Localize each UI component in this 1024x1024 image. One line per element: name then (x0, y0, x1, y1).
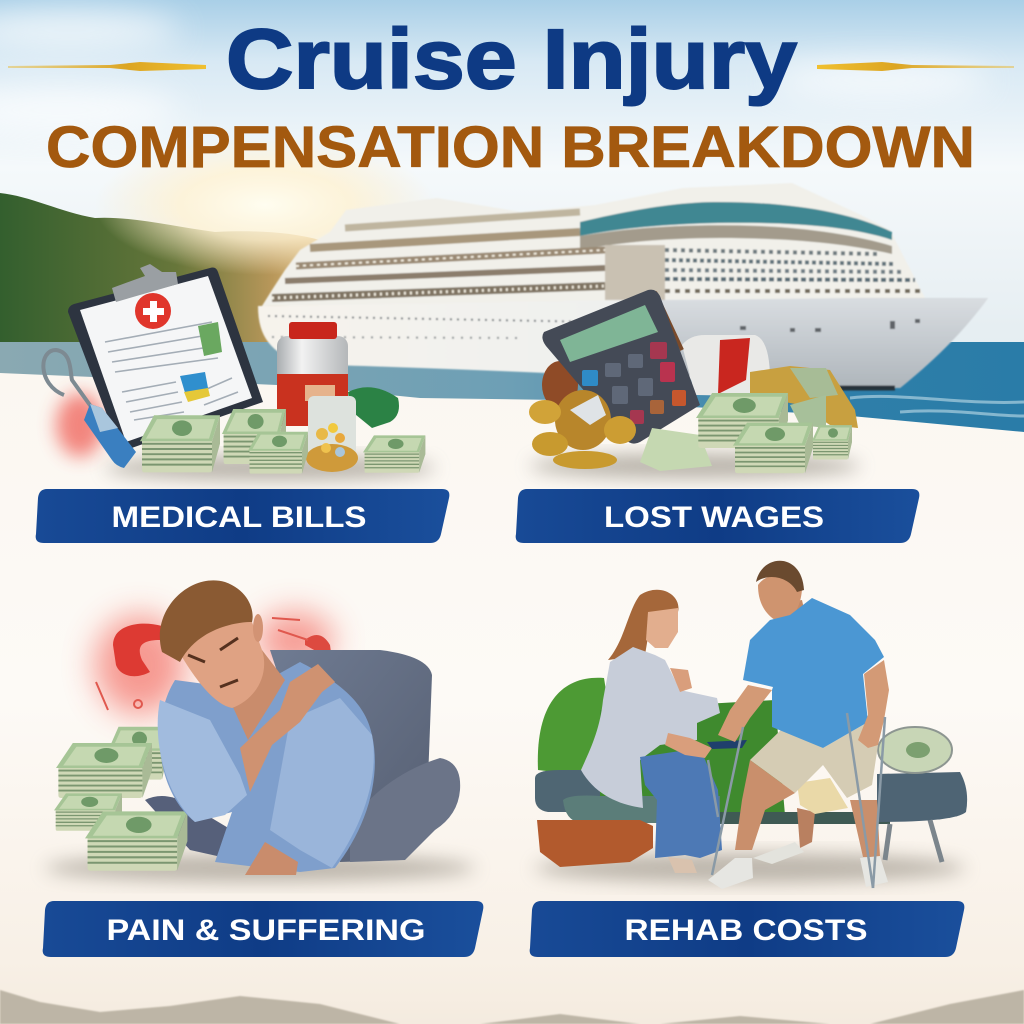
ground shadow (105, 456, 435, 480)
icon: clipboard (68, 264, 263, 450)
back leg and shoe (797, 808, 815, 848)
neck (232, 650, 285, 740)
forearm and hand (240, 664, 335, 792)
face (646, 608, 678, 648)
icon: cash stacks (140, 409, 425, 474)
label: pain and suffering (43, 901, 483, 957)
face (178, 622, 264, 708)
figure: patient (708, 561, 889, 889)
red pain glow (95, 612, 333, 715)
shoes (708, 856, 888, 889)
icon: cash on sofa (878, 727, 952, 773)
label: medical bills: MEDICAL BILLS (112, 501, 366, 534)
trousers (640, 748, 722, 858)
ship hull left (258, 298, 988, 388)
label: rehab costs (530, 901, 964, 957)
arms (718, 660, 889, 748)
icon: pills jar (306, 396, 358, 472)
tower block (605, 245, 665, 300)
tablet (707, 740, 747, 749)
sand foreground (0, 373, 1024, 1024)
figure: therapist (581, 590, 747, 873)
shirt (160, 662, 375, 872)
portholes (268, 316, 600, 322)
label: pain and suffering: PAIN & SUFFERING (106, 914, 426, 947)
shirt (743, 598, 884, 748)
cloth (797, 778, 848, 814)
panel: pain and suffering (45, 580, 475, 882)
icon: green sofa (535, 678, 967, 862)
panel: lost wages (529, 290, 860, 478)
teal glass deck (580, 202, 892, 240)
ground shadow (535, 853, 965, 883)
neck (772, 600, 806, 632)
panel: rehab costs (535, 561, 967, 889)
label: lost wages (516, 489, 919, 543)
sea foam (850, 396, 1024, 416)
title line two: COMPENSATION BREAKDOWN (46, 115, 975, 180)
panel: medical bills (43, 264, 435, 480)
icon: pill bottle (277, 322, 348, 426)
sun glow (95, 135, 435, 275)
icon: cash stacks (640, 393, 852, 473)
right gold rule (817, 62, 1014, 71)
left deck bands (272, 212, 605, 298)
shoes (668, 857, 697, 873)
left gold rule (8, 62, 206, 71)
waterline (838, 386, 895, 390)
legs (735, 760, 880, 857)
icon: first aid kit (655, 292, 770, 396)
title (8, 12, 1014, 180)
icon: wooden box (537, 820, 653, 867)
icon: pain marks (96, 618, 332, 710)
icon: green pill box (348, 387, 399, 428)
eyes and mouth (188, 638, 238, 687)
coat (581, 647, 720, 808)
icon: leather strap (542, 361, 578, 409)
sea (0, 342, 1024, 432)
hair (160, 580, 253, 662)
ship superstructure (262, 183, 925, 306)
window strips (272, 250, 920, 298)
icon: coins and gold pile (529, 366, 858, 469)
clouds (0, 10, 990, 134)
label: lost wages: LOST WAGES (604, 501, 824, 534)
distant hills (0, 193, 320, 345)
shorts (750, 722, 878, 798)
hair (608, 590, 678, 660)
head (758, 574, 802, 620)
red glow (56, 393, 104, 457)
bottom mountains (0, 990, 1024, 1024)
icon: cash stacks (54, 727, 187, 871)
background sky (0, 0, 1024, 440)
hands and forearms (665, 668, 712, 758)
cruise ship (258, 183, 988, 388)
icon: calculator (542, 290, 700, 444)
figure: injured man (158, 580, 375, 875)
label: medical bills (36, 489, 449, 543)
hair (756, 561, 804, 592)
ground shadow (45, 854, 475, 882)
icon: crutches (708, 713, 885, 888)
ear (253, 614, 263, 642)
label: rehab costs: REHAB COSTS (624, 914, 868, 947)
icon: armchair (145, 650, 460, 862)
title line one: Cruise Injury (226, 12, 797, 106)
icon: stethoscope (43, 350, 136, 468)
ground shadow (530, 454, 860, 478)
ship hull bow (650, 298, 988, 388)
